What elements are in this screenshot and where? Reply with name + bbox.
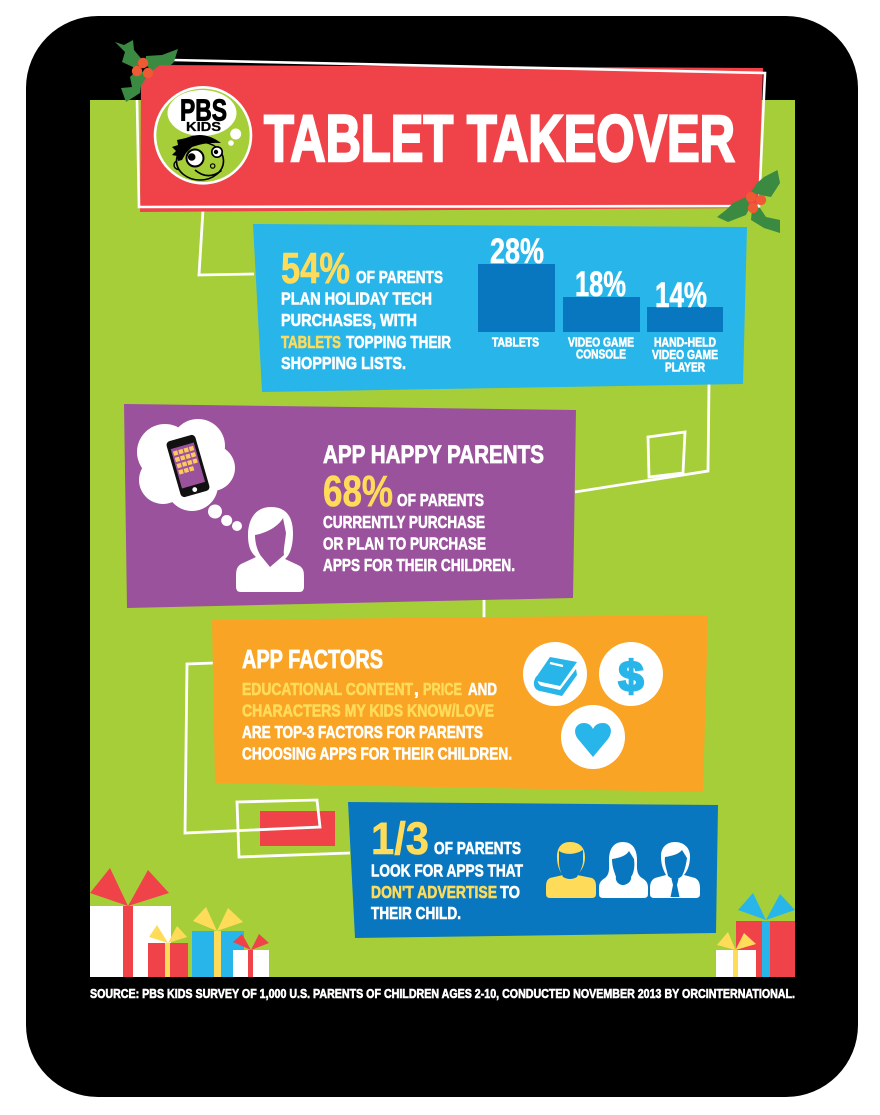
icon: parent silhouette — [236, 507, 304, 592]
gift: right red box — [736, 893, 795, 977]
text block: , — [414, 679, 419, 699]
PBS Kids logo — [155, 87, 251, 183]
text block: PRICE — [423, 679, 462, 699]
statistic text block: TOPPING THEIR — [346, 332, 451, 352]
red accent rectangle — [260, 811, 335, 846]
text block: APP FACTORS — [242, 644, 383, 674]
bar chart: CONSOLE — [576, 346, 626, 362]
icon: white mother — [599, 842, 648, 898]
text block: EDUCATIONAL CONTENT — [242, 679, 413, 699]
icon: dollar — [599, 642, 663, 706]
panel: one third of parents — [348, 802, 718, 938]
bar chart: TABLETS — [492, 334, 539, 350]
bar chart: 18% — [575, 265, 626, 304]
bar chart — [478, 232, 723, 374]
icon: dollar: $ — [618, 653, 644, 701]
holly bottom right — [717, 170, 780, 233]
gift: right white box — [716, 932, 756, 977]
gift: small red box — [148, 925, 188, 977]
bar chart: VIDEO GAME — [568, 334, 634, 350]
panel: app happy parents — [124, 404, 576, 608]
gift: large white box — [90, 868, 171, 977]
text block — [242, 644, 512, 764]
icon: heart — [561, 705, 625, 769]
white connector lines and outline squares — [199, 210, 709, 618]
icon: yellow father — [546, 842, 596, 898]
statistic text block: OF PARENTS — [356, 267, 443, 287]
holly top left — [115, 40, 178, 102]
title banner — [137, 60, 765, 212]
statistic text block — [281, 244, 451, 373]
text block — [323, 441, 544, 575]
text block: APP HAPPY PARENTS — [323, 441, 544, 469]
text block: OF PARENTS — [397, 490, 484, 510]
statistic text block: 54% — [281, 244, 350, 293]
text block: APPS FOR THEIR CHILDREN. — [323, 555, 515, 575]
text block: TO — [500, 882, 520, 902]
bar chart: HAND-HELD — [654, 334, 716, 350]
icon: book — [523, 642, 587, 706]
text block: DON'T ADVERTISE — [371, 882, 497, 902]
icon: three parents — [546, 842, 700, 898]
PBS Kids logo: PBS — [180, 92, 227, 128]
bar chart: VIDEO GAME — [652, 347, 718, 362]
text block: ARE TOP-3 FACTORS FOR PARENTS — [242, 722, 483, 742]
gift: small white box — [233, 934, 269, 977]
panel: tablets and tech purchases — [253, 224, 747, 392]
text block: OR PLAN TO PURCHASE — [323, 534, 486, 554]
icon: thought cloud with phone — [137, 419, 242, 531]
text block: LOOK FOR APPS THAT — [371, 860, 523, 880]
lower connector outline — [185, 663, 350, 857]
Dash character — [172, 135, 224, 180]
text block: CURRENTLY PURCHASE — [323, 512, 485, 532]
icon: white father with tie — [650, 842, 700, 898]
text block: OF PARENTS — [434, 838, 521, 858]
bar chart: PLAYER — [665, 360, 705, 374]
statistic text block: TABLETS — [281, 332, 341, 352]
text block: CHOOSING APPS FOR THEIR CHILDREN. — [242, 744, 512, 764]
bar chart: 28% — [490, 232, 544, 271]
text block: THEIR CHILD. — [371, 903, 461, 923]
green screen background — [90, 100, 795, 977]
text block — [371, 813, 523, 923]
text block: 68% — [323, 467, 393, 516]
PBS Kids logo: KIDS — [186, 119, 221, 134]
statistic text block: SHOPPING LISTS. — [281, 353, 406, 373]
text block: CHARACTERS MY KIDS KNOW/LOVE — [242, 700, 494, 720]
gift: blue box — [192, 907, 244, 977]
statistic text block: PURCHASES, WITH — [281, 310, 417, 330]
text block: 1/3 — [371, 813, 429, 864]
panel: app factors — [212, 615, 708, 792]
statistic text block: PLAN HOLIDAY TECH — [281, 288, 432, 308]
text block: AND — [468, 679, 497, 699]
bar chart: 14% — [655, 276, 707, 315]
